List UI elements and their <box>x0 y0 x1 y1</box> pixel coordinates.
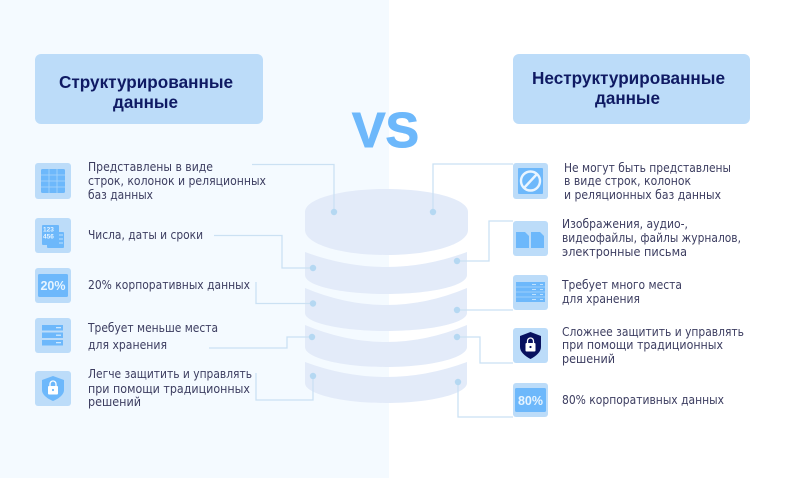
icon: dark shield with lock <box>513 328 548 363</box>
item: harder to protect: при помощи традиционных <box>562 338 723 352</box>
item: numbers and dates: Числа, даты и сроки <box>88 228 203 242</box>
icon: numbers document <box>35 218 71 253</box>
item: easier to protect <box>35 367 252 409</box>
item: numbers and dates <box>35 218 203 253</box>
item: images, audio, video: Изображения, аудио-, <box>562 217 688 231</box>
item: 20 percent <box>35 268 250 303</box>
icon: table grid <box>35 163 71 199</box>
icon: numbers document: 456 <box>43 234 54 240</box>
item: much storage <box>513 275 682 310</box>
item: much storage: Требует много места <box>561 278 682 292</box>
item: cannot be rows and columns (unstructured): в виде строк, колонок <box>564 174 691 188</box>
heading: structured data: Структурированные <box>59 72 233 92</box>
icon: numbers document: 123 <box>43 226 54 234</box>
item: easier to protect: решений <box>88 395 141 409</box>
icon: two files <box>513 221 548 256</box>
item: rows and columns (structured): строк, колонок и реляционных <box>88 174 266 188</box>
connectors: right side <box>430 164 513 417</box>
item: easier to protect: Легче защитить и управлять <box>88 367 252 381</box>
item: rows and columns (structured): баз данных <box>88 188 153 202</box>
item: 20 percent: 20% корпоративных данных <box>88 278 250 292</box>
item: cannot be rows and columns (unstructured): Не могут быть представлены <box>564 161 731 175</box>
icon: 20% badge <box>35 268 71 303</box>
heading: structured data: данные <box>113 92 178 112</box>
heading: structured data <box>35 54 263 124</box>
heading: unstructured data: Неструктурированные <box>532 68 725 88</box>
database cylinder <box>305 189 468 403</box>
item: harder to protect <box>513 325 744 366</box>
heading: unstructured data <box>513 54 750 124</box>
item: cannot be rows and columns (unstructured): и реляционных баз данных <box>564 188 721 202</box>
item: images, audio, video: видеофайлы, файлы журналов, <box>562 231 741 245</box>
item: 80 percent <box>513 383 724 417</box>
item: rows and columns (structured): Представлены в виде <box>88 160 213 174</box>
item: less storage: Требует меньше места <box>87 321 218 335</box>
item: cannot be rows and columns (unstructured) <box>513 161 731 202</box>
connectors: left side <box>209 164 337 400</box>
VS label: VS <box>352 104 419 158</box>
icon: 80% badge: 80% <box>518 394 543 408</box>
left background panel <box>0 0 389 478</box>
icon: 80% badge <box>513 383 548 417</box>
item: harder to protect: Сложнее защитить и управлять <box>562 325 744 339</box>
icon: light shield with lock <box>35 371 71 406</box>
item: rows and columns (structured) <box>35 160 266 202</box>
item: 80 percent: 80% корпоративных данных <box>562 393 724 407</box>
item: harder to protect: решений <box>562 352 615 366</box>
item: less storage <box>35 318 218 353</box>
item: much storage: для хранения <box>562 292 640 306</box>
item: easier to protect: при помощи традиционных <box>88 382 250 396</box>
item: images, audio, video: электронные письма <box>562 245 687 259</box>
heading: unstructured data: данные <box>595 88 660 108</box>
item: images, audio, video <box>513 217 741 259</box>
icon: wide server table <box>513 275 548 310</box>
item: less storage: для хранения <box>88 338 167 352</box>
icon: server stack <box>35 318 71 353</box>
icon: 20% badge: 20% <box>40 279 66 293</box>
icon: crossed-out grid <box>513 163 548 199</box>
